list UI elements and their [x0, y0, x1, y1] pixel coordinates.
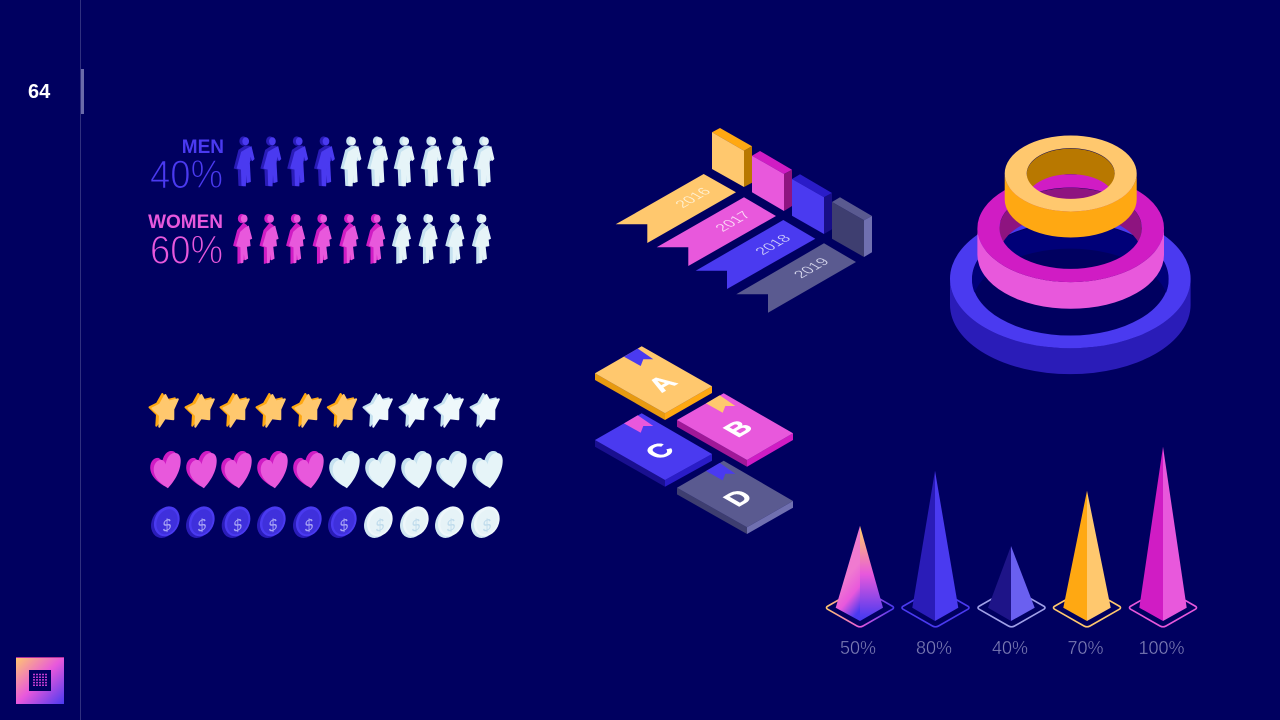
pyramid 50%: 50% [840, 638, 876, 658]
coins row: $ [483, 515, 491, 537]
men label: MEN [182, 137, 224, 158]
coins row: $ [234, 515, 242, 537]
pyramid 100% [1130, 447, 1196, 658]
book D [677, 461, 793, 534]
coins row [146, 502, 504, 542]
book A: A [641, 371, 684, 396]
book B: B [717, 416, 760, 441]
women label: 60% [150, 228, 223, 272]
hearts row [150, 451, 503, 488]
block 2018 [792, 174, 832, 234]
coins row: $ [376, 515, 384, 537]
book C: C [638, 439, 681, 463]
panel: books A B C D [595, 346, 793, 534]
blue ring [950, 209, 1191, 374]
pyramid 70%: 70% [1067, 638, 1104, 658]
book C [595, 413, 712, 487]
pink ring [977, 174, 1164, 309]
ribbon 2016 [616, 174, 736, 243]
panel: pyramid chart [826, 447, 1196, 658]
coins row: $ [163, 515, 171, 537]
women label: WOMEN [148, 212, 223, 233]
page number: 64 [28, 81, 51, 103]
panel: timeline ribbons and blocks [616, 128, 872, 313]
panel: stacked rings [950, 136, 1191, 374]
block 2016 [712, 128, 752, 187]
logo [16, 657, 64, 704]
women label [148, 212, 223, 272]
coins row: $ [412, 515, 420, 537]
men icons row [234, 137, 494, 186]
ribbon 2018: 2018 [752, 232, 795, 258]
men label: 40% [150, 153, 223, 197]
coins row: $ [340, 515, 348, 537]
orange ring [1005, 136, 1137, 237]
pyramid 80%: 80% [916, 638, 952, 658]
men label [150, 137, 224, 197]
coins row: $ [447, 515, 455, 537]
book A [595, 346, 712, 420]
ribbon 2019: 2019 [790, 256, 834, 281]
panel: icon rating rows [146, 394, 504, 542]
pyramid 40% [978, 546, 1045, 658]
coins row: $ [198, 515, 206, 537]
block 2017 [752, 151, 792, 211]
ribbon 2019 [736, 243, 856, 313]
pyramid 40%: 40% [992, 638, 1028, 658]
sidebar [16, 0, 84, 720]
women icons row [234, 214, 491, 264]
book D: D [717, 486, 760, 510]
block 2019 [832, 197, 872, 257]
pyramid 50% [826, 526, 894, 658]
book B [677, 393, 793, 467]
pyramid 70% [1054, 491, 1120, 658]
ribbon 2017 [657, 197, 776, 266]
ribbon 2016: 2016 [672, 185, 715, 211]
panel: men and women pictogram [148, 137, 494, 272]
ribbon 2018 [696, 220, 815, 289]
ribbon 2017: 2017 [712, 209, 755, 234]
pyramid 80% [902, 471, 969, 658]
pyramid 100%: 100% [1138, 638, 1185, 658]
coins row: $ [269, 515, 277, 537]
stars row [150, 394, 499, 427]
coins row: $ [305, 515, 313, 537]
